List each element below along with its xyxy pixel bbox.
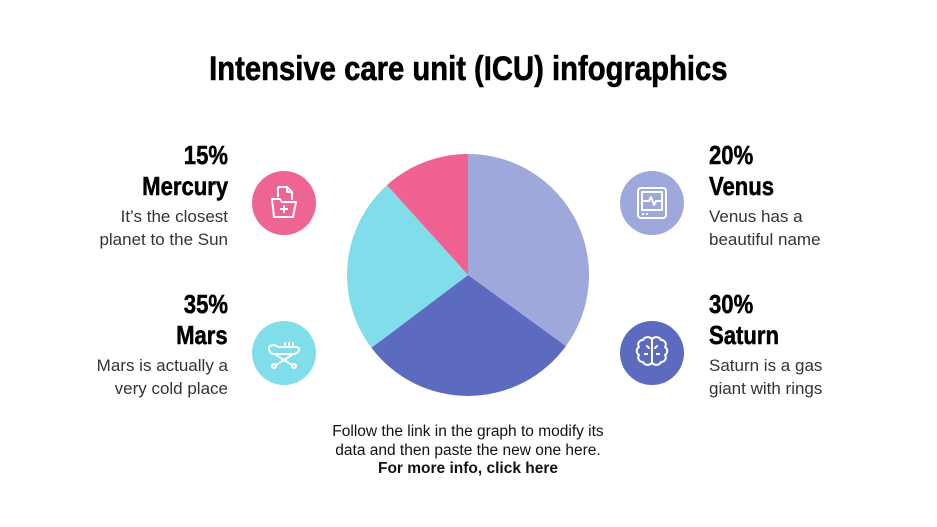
icon: folder bbox=[252, 171, 316, 235]
slice: Mars bbox=[347, 185, 468, 348]
text: Venus: 20% bbox=[709, 140, 753, 170]
text: Mars: Mars bbox=[176, 320, 228, 350]
text: Mars: Mars is actually a bbox=[97, 356, 228, 375]
text: Mercury: 15% bbox=[184, 140, 228, 170]
text: Saturn: Saturn is a gas bbox=[709, 356, 822, 375]
icon: brain bbox=[620, 321, 684, 385]
note text bbox=[332, 423, 604, 477]
text: Mercury: It’s the closest bbox=[121, 207, 228, 226]
title: Intensive care unit (ICU) infographics bbox=[209, 50, 728, 88]
text: Venus bbox=[708, 140, 821, 249]
text: Mercury: Mercury bbox=[142, 171, 228, 201]
text: Venus: Venus has a bbox=[709, 207, 803, 226]
note text: Follow the link in the graph to modify its bbox=[332, 423, 604, 440]
text: Saturn bbox=[709, 289, 822, 398]
note text: For more info, click here bbox=[378, 460, 558, 477]
icon: monitor bbox=[620, 171, 684, 235]
icon: stretcher bbox=[252, 321, 316, 385]
text: Saturn: Saturn bbox=[709, 320, 779, 350]
text: Saturn: giant with rings bbox=[709, 379, 822, 398]
note text: data and then paste the new one here. bbox=[335, 442, 601, 458]
slice: Mercury bbox=[387, 154, 468, 275]
slice: Saturn bbox=[371, 275, 566, 396]
text: Mercury bbox=[99, 140, 228, 249]
text: Mars: very cold place bbox=[115, 379, 228, 398]
text: Venus: Venus bbox=[709, 171, 774, 201]
text: Mars bbox=[97, 289, 228, 398]
text: Venus: beautiful name bbox=[709, 230, 821, 249]
text: Saturn: 30% bbox=[709, 289, 753, 319]
text: Mercury: planet to the Sun bbox=[99, 230, 228, 249]
slice: Venus bbox=[468, 154, 589, 346]
text: Mars: 35% bbox=[184, 289, 228, 319]
